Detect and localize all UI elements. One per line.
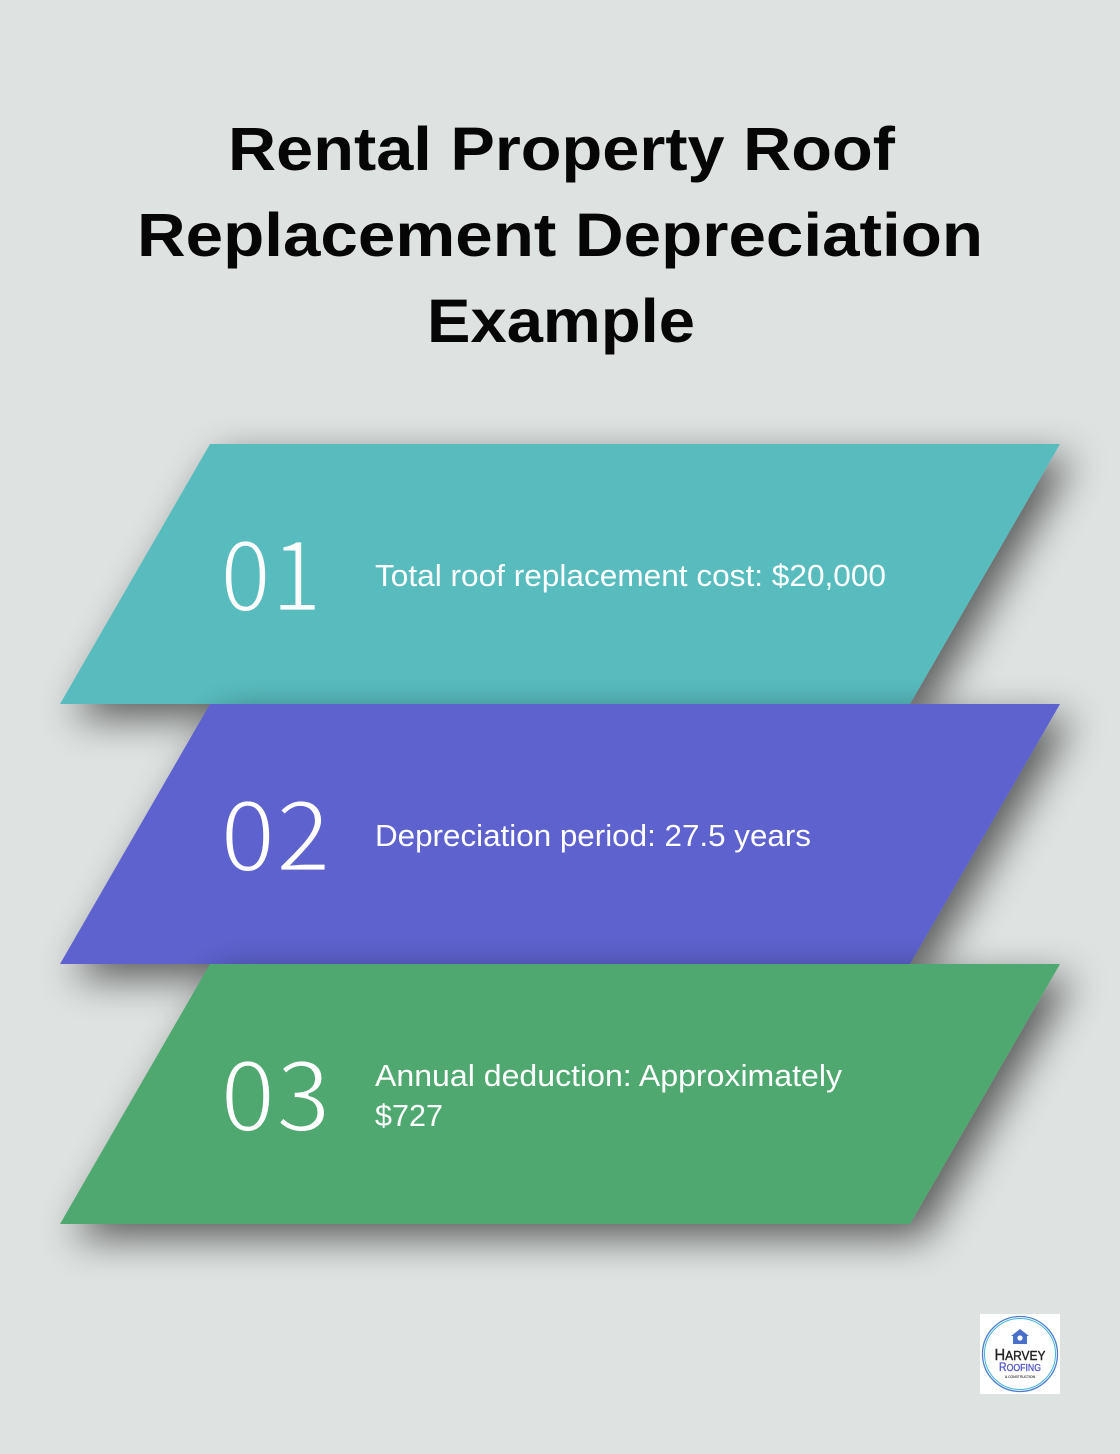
- panel: step 01: [60, 444, 1060, 704]
- step number 03: 03: [220, 1018, 331, 1160]
- step text: depreciation period: Depreciation period: 27.5 years: [375, 818, 811, 853]
- logo: Harvey Roofing: HARVEY: [994, 1347, 1046, 1364]
- panel: step 02: [60, 704, 1060, 964]
- title: Example: [427, 287, 695, 355]
- step text: annual deduction: [375, 1058, 843, 1133]
- step text: annual deduction: Annual deduction: Approximately: [375, 1058, 843, 1093]
- panel: step 03: [60, 964, 1060, 1224]
- logo: Harvey Roofing: [980, 1314, 1060, 1394]
- icon: house with heart: [1011, 1329, 1029, 1344]
- logo: Harvey Roofing: ROOFING: [999, 1360, 1041, 1374]
- step number 02: 02: [220, 758, 331, 900]
- step text: annual deduction: $727: [375, 1098, 443, 1133]
- title: Replacement Depreciation: [137, 201, 983, 269]
- step number 01: 01: [220, 498, 322, 640]
- logo: Harvey Roofing: & CONSTRUCTION: [1005, 1375, 1035, 1379]
- step text: total cost: Total roof replacement cost: $20,000: [375, 558, 886, 593]
- title: Rental Property Roof: [228, 115, 896, 183]
- title: [137, 115, 983, 355]
